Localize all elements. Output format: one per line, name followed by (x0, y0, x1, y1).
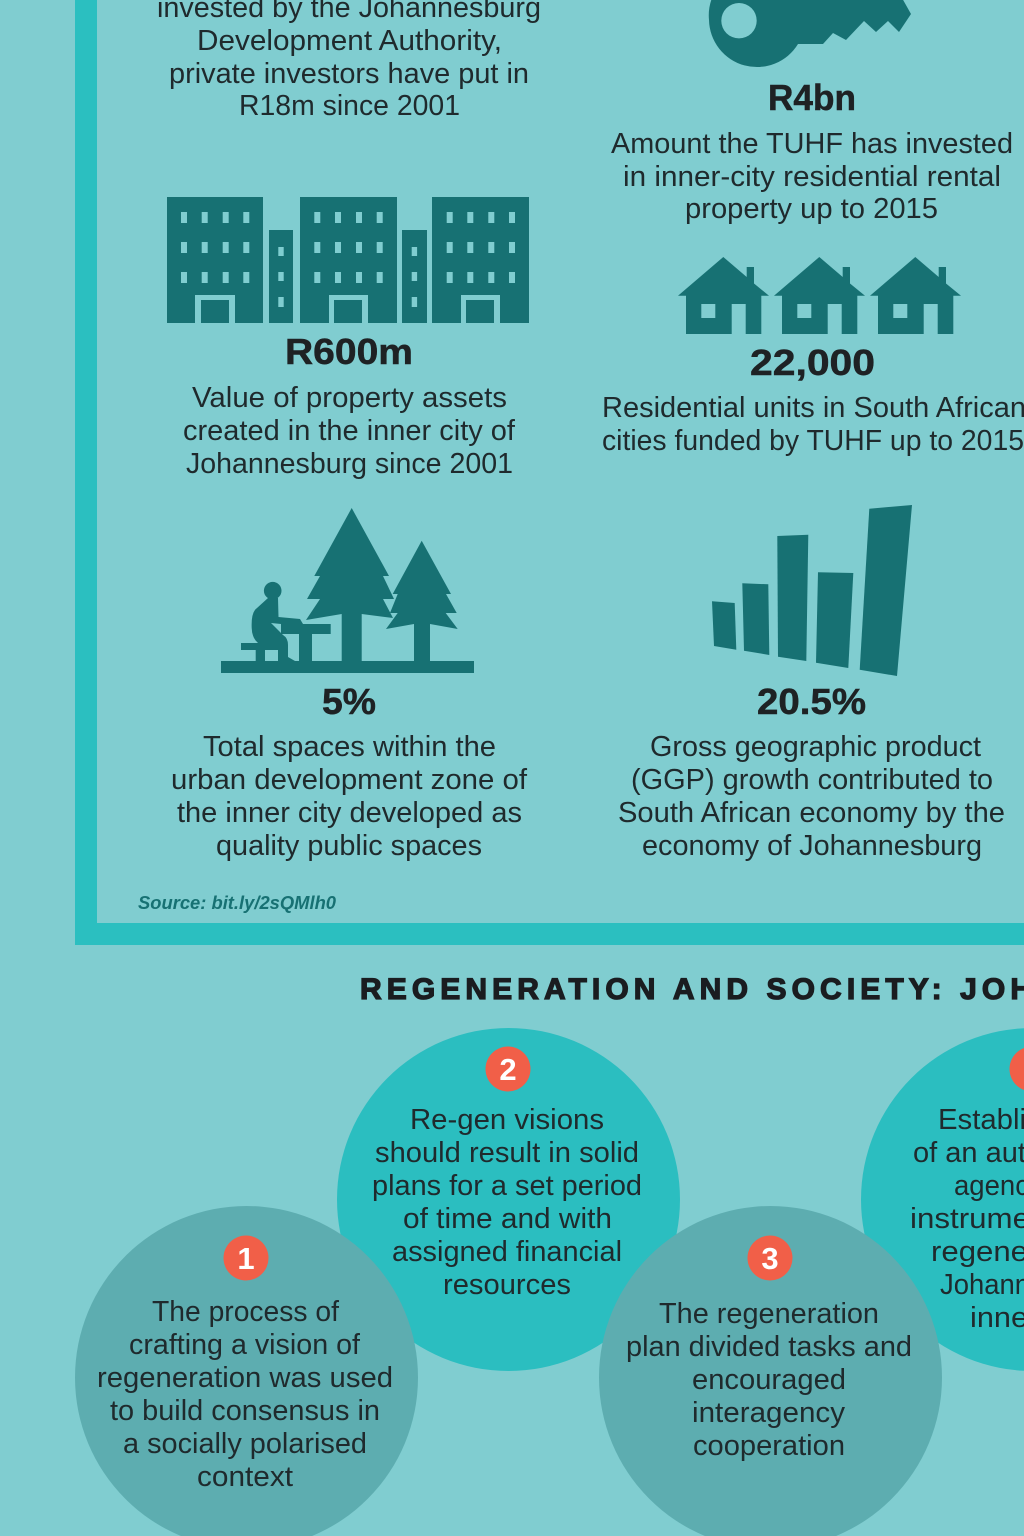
circle 2: re-gen visions: 2 (499, 1052, 517, 1087)
circle 2: re-gen visions: of time and with (403, 1203, 612, 1235)
circle 3: regeneration plan: interagency (692, 1397, 846, 1429)
circle 3: regeneration plan: encouraged (692, 1364, 846, 1396)
circle 3: regeneration plan (599, 1206, 942, 1536)
circle 4: autonomous agency (cropped at page edge): instrume (910, 1203, 1024, 1235)
text block: private investment: Development Authority, (197, 25, 502, 57)
stat: R4bn (611, 77, 1013, 225)
heading: regeneration and society: REGENERATION AND SOCIETY: JOH (360, 973, 1024, 1006)
stat: R4bn: Amount the TUHF has invested (611, 128, 1013, 160)
circle 2: re-gen visions: Re-gen visions (410, 1104, 604, 1136)
stat: 5%: 5% (322, 681, 376, 722)
circle 2: re-gen visions: assigned financial (392, 1236, 622, 1268)
icon: rising bar chart (712, 505, 912, 676)
stat: 22,000: cities funded by TUHF up to 2015 (602, 425, 1024, 457)
stat: 22,000: 22,000 (750, 342, 875, 383)
circle 3: regeneration plan: 3 (761, 1241, 779, 1276)
stat: 20.5%: South African economy by the (618, 797, 1005, 829)
circle 1: vision of regeneration: a socially polarised (123, 1428, 367, 1460)
circle 1: vision of regeneration: context (197, 1461, 293, 1493)
icon: person at picnic table under trees (221, 508, 474, 673)
stat: R4bn: in inner-city residential rental (623, 161, 1001, 193)
circle 1: vision of regeneration (75, 1206, 418, 1536)
circle 2: re-gen visions: should result in solid (375, 1137, 639, 1169)
circle 2: re-gen visions (337, 1028, 680, 1371)
circle 1: vision of regeneration: regeneration was used (97, 1362, 393, 1394)
stat: 5%: Total spaces within the (203, 731, 496, 763)
stat: 20.5%: (GGP) growth contributed to (631, 764, 993, 796)
circle 1: vision of regeneration: crafting a vision of (129, 1329, 361, 1361)
circle 2: re-gen visions: plans for a set period (372, 1170, 642, 1202)
circle 3: regeneration plan: The regeneration (659, 1298, 879, 1330)
stat: R600m (183, 331, 516, 480)
icon: three houses (678, 257, 961, 334)
stat: 20.5%: Gross geographic product (650, 731, 981, 763)
text block: private investment (157, 0, 541, 122)
circle 4: autonomous agency (cropped at page edge): Establi (938, 1104, 1024, 1136)
circle 3: regeneration plan: plan divided tasks and (626, 1331, 912, 1363)
stat: 5%: the inner city developed as (177, 797, 522, 829)
stat: R4bn: property up to 2015 (685, 193, 938, 225)
stat: 5%: urban development zone of (171, 764, 528, 796)
stat: 20.5% (618, 681, 1005, 862)
stat: R600m: R600m (285, 331, 413, 372)
circle 4: autonomous agency (cropped at page edge): regene (931, 1236, 1024, 1268)
circle 2: re-gen visions: resources (443, 1269, 571, 1301)
circle 1: vision of regeneration: The process of (152, 1296, 340, 1328)
stat: R600m: Value of property assets (192, 382, 507, 414)
icon: key (709, 0, 911, 67)
circle 1: vision of regeneration: 1 (237, 1241, 255, 1276)
panel: inner-city statistics frame (75, 0, 1024, 945)
circle 4: autonomous agency (cropped at page edge): of an aut (913, 1137, 1024, 1169)
circle 1: vision of regeneration: to build consensus in (110, 1395, 380, 1427)
stat: R4bn: R4bn (768, 77, 856, 118)
text block: private investment: R18m since 2001 (239, 90, 460, 122)
stat: 5%: quality public spaces (216, 830, 482, 862)
source note: Source: bit.ly/2sQMlh0 (138, 893, 336, 913)
stat: R600m: Johannesburg since 2001 (186, 448, 513, 480)
stat: R600m: created in the inner city of (183, 415, 516, 447)
circle 4: autonomous agency (cropped at page edge) (861, 1028, 1024, 1371)
stat: 20.5%: 20.5% (757, 681, 866, 722)
stat: 22,000: Residential units in South African (602, 392, 1024, 424)
icon: apartment buildings (167, 197, 529, 323)
stat: 20.5%: economy of Johannesburg (642, 830, 982, 862)
stat: 5% (171, 681, 528, 862)
circle 4: autonomous agency (cropped at page edge): inne (970, 1302, 1024, 1334)
text block: private investment: private investors have put in (169, 58, 529, 90)
stat: 22,000 (602, 342, 1024, 457)
circle 3: regeneration plan: cooperation (693, 1430, 845, 1462)
